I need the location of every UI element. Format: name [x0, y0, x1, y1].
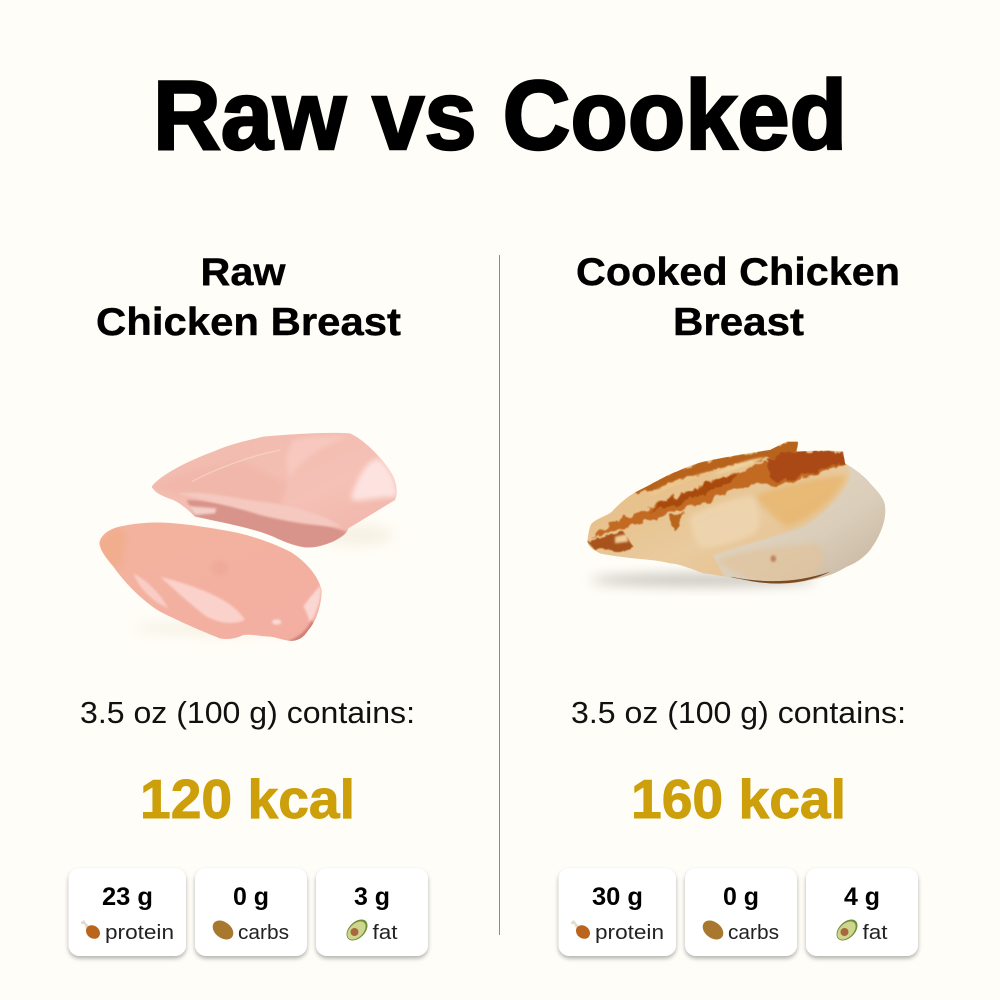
card: fat: 3 g — [354, 883, 390, 911]
heading: raw chicken breast — [96, 251, 401, 344]
card: protein: protein — [105, 922, 174, 944]
title: Raw vs Cooked — [153, 60, 847, 170]
card: fat — [806, 868, 918, 956]
icon: avocado — [833, 916, 861, 944]
calories: 120 kcal — [140, 768, 355, 830]
heading: cooked chicken breast: Cooked Chicken — [576, 251, 900, 294]
panel: raw chicken breast — [68, 251, 428, 956]
serving text: 3.5 oz (100 g) contains: — [80, 695, 415, 730]
card: carbs: 0 g — [233, 883, 269, 911]
icon: avocado — [343, 916, 371, 944]
heading: cooked chicken breast: Breast — [673, 301, 804, 344]
card: fat: fat — [862, 922, 888, 944]
panel: cooked chicken breast — [558, 251, 918, 956]
calories: 160 kcal — [631, 768, 846, 830]
card: protein: protein — [595, 922, 664, 944]
card: carbs — [195, 868, 307, 956]
image: cooked chicken breast — [587, 442, 890, 587]
card: protein: 23 g — [102, 883, 153, 911]
card: carbs: carbs — [238, 922, 289, 944]
card: fat: 4 g — [844, 883, 880, 911]
icon: drumstick — [571, 920, 593, 942]
card: carbs: carbs — [728, 922, 779, 944]
card: carbs — [685, 868, 797, 956]
heading: raw chicken breast: Raw — [200, 251, 286, 294]
card: protein — [558, 868, 676, 956]
card: carbs: 0 g — [723, 883, 759, 911]
card: protein: 30 g — [592, 883, 643, 911]
icon: potato — [209, 917, 237, 943]
divider — [499, 255, 500, 935]
serving text: 3.5 oz (100 g) contains: — [571, 695, 906, 730]
icon: drumstick — [81, 920, 103, 942]
card: fat — [316, 868, 428, 956]
icon: potato — [699, 917, 727, 943]
card: protein — [68, 868, 186, 956]
image: raw chicken breasts — [97, 433, 397, 647]
heading: raw chicken breast: Chicken Breast — [96, 301, 401, 344]
card: fat: fat — [372, 922, 398, 944]
heading: cooked chicken breast — [576, 251, 900, 344]
